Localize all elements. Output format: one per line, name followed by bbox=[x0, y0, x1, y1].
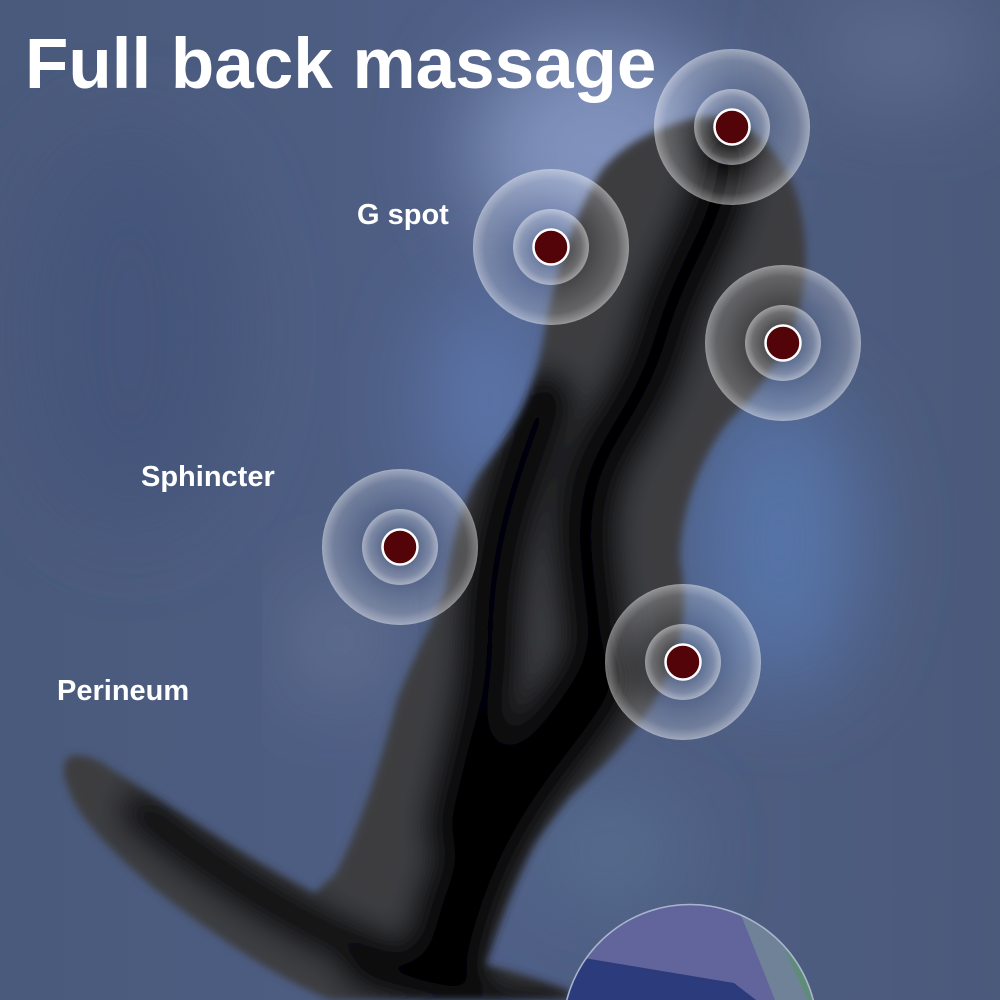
badge: inset colour circle at bottom bbox=[566, 904, 814, 1000]
massage point: G spot bbox=[473, 169, 629, 325]
massage point: lower right bbox=[605, 584, 761, 740]
label: G spot: G spot bbox=[357, 199, 449, 231]
title: Full back massage bbox=[25, 25, 656, 104]
massage point: right bbox=[705, 265, 861, 421]
label: Perineum: Perineum bbox=[57, 675, 189, 707]
massage point: sphincter bbox=[322, 469, 478, 625]
massage point: top bbox=[654, 49, 810, 205]
label: Sphincter: Sphincter bbox=[141, 461, 275, 493]
body folds bbox=[140, 150, 725, 1000]
product silhouette bbox=[60, 112, 810, 1000]
